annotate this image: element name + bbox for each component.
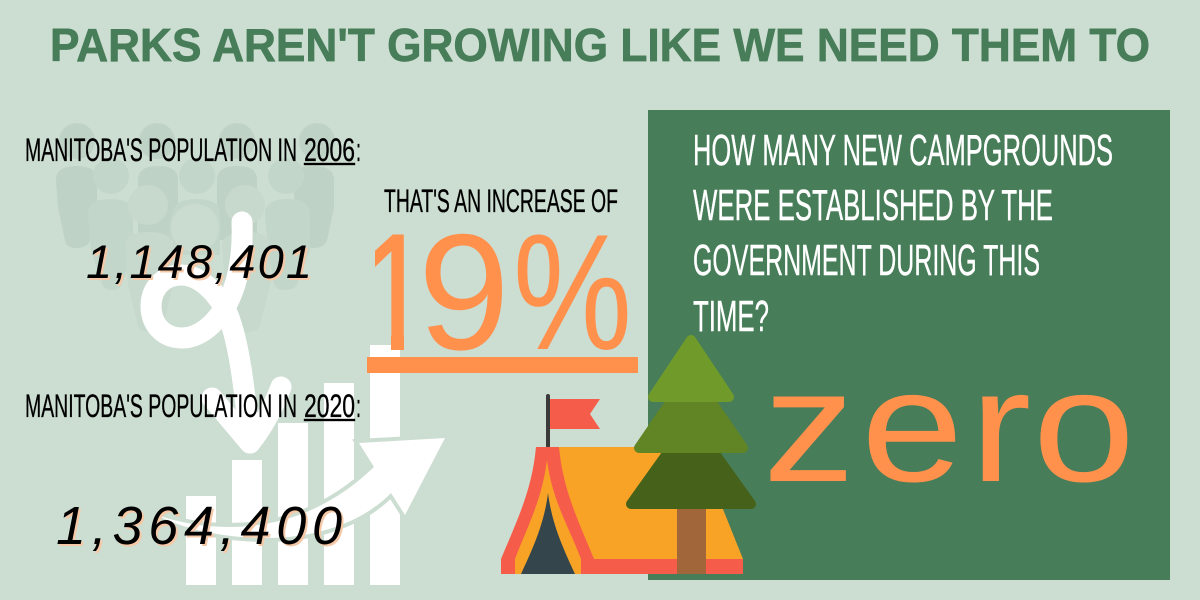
stat: 19 percent: % bbox=[513, 200, 632, 384]
growth arrow bbox=[157, 438, 445, 538]
flag pole bbox=[546, 394, 550, 448]
flag bbox=[550, 399, 600, 429]
panel: campgrounds question bbox=[648, 110, 1170, 580]
text: population 2020 label: : bbox=[356, 388, 361, 424]
question text: TIME? bbox=[693, 292, 769, 341]
icon: pine tree bbox=[631, 340, 751, 574]
text: population 2020 label: 2020 bbox=[304, 388, 355, 424]
centre head bbox=[170, 203, 220, 253]
tent door bbox=[521, 493, 575, 574]
stat: 19 percent bbox=[375, 234, 628, 351]
middle foliage bbox=[639, 372, 743, 448]
number: 2020 population: 1,364,400 bbox=[58, 498, 344, 558]
tent body bbox=[545, 447, 743, 574]
underline bar bbox=[367, 357, 638, 373]
stat: zero: zero bbox=[763, 336, 1135, 515]
icon: white hand-drawn loop arrow bbox=[151, 222, 281, 443]
icon: tent with flag bbox=[501, 394, 743, 574]
text: population 2006 label: : bbox=[356, 132, 361, 168]
number: 2006 population: 1,148,401 bbox=[88, 237, 314, 290]
icon: crowd of people silhouettes bbox=[56, 123, 335, 332]
middle row bbox=[88, 158, 310, 290]
question text bbox=[693, 126, 1113, 341]
number: 2020 population: 1,364,400 bbox=[56, 496, 342, 556]
text: increase label: THAT'S AN INCREASE OF bbox=[384, 183, 618, 219]
tent flap lining bbox=[515, 460, 581, 574]
text: population 2006 label: 2006 bbox=[304, 132, 355, 168]
tent front arch bbox=[501, 447, 594, 574]
lower foliage bbox=[631, 420, 751, 504]
text: population 2020 label: MANITOBA'S POPULATION IN bbox=[25, 388, 297, 424]
text: population 2006 label: MANITOBA'S POPULATION IN bbox=[25, 132, 297, 168]
top foliage bbox=[653, 340, 729, 397]
bars bbox=[186, 345, 400, 585]
trunk bbox=[677, 505, 706, 574]
tent base band bbox=[590, 559, 743, 574]
chart: rising white bars with arrow bbox=[157, 345, 445, 585]
stat: 19 percent: 9 bbox=[418, 200, 510, 384]
stat: 19 percent: 1 bbox=[361, 200, 430, 384]
title: PARKS AREN'T GROWING LIKE WE NEED THEM TO bbox=[50, 19, 1150, 71]
number: 2006 population: 1,148,401 bbox=[86, 235, 312, 288]
back row bbox=[56, 123, 335, 248]
front row bbox=[125, 185, 270, 332]
